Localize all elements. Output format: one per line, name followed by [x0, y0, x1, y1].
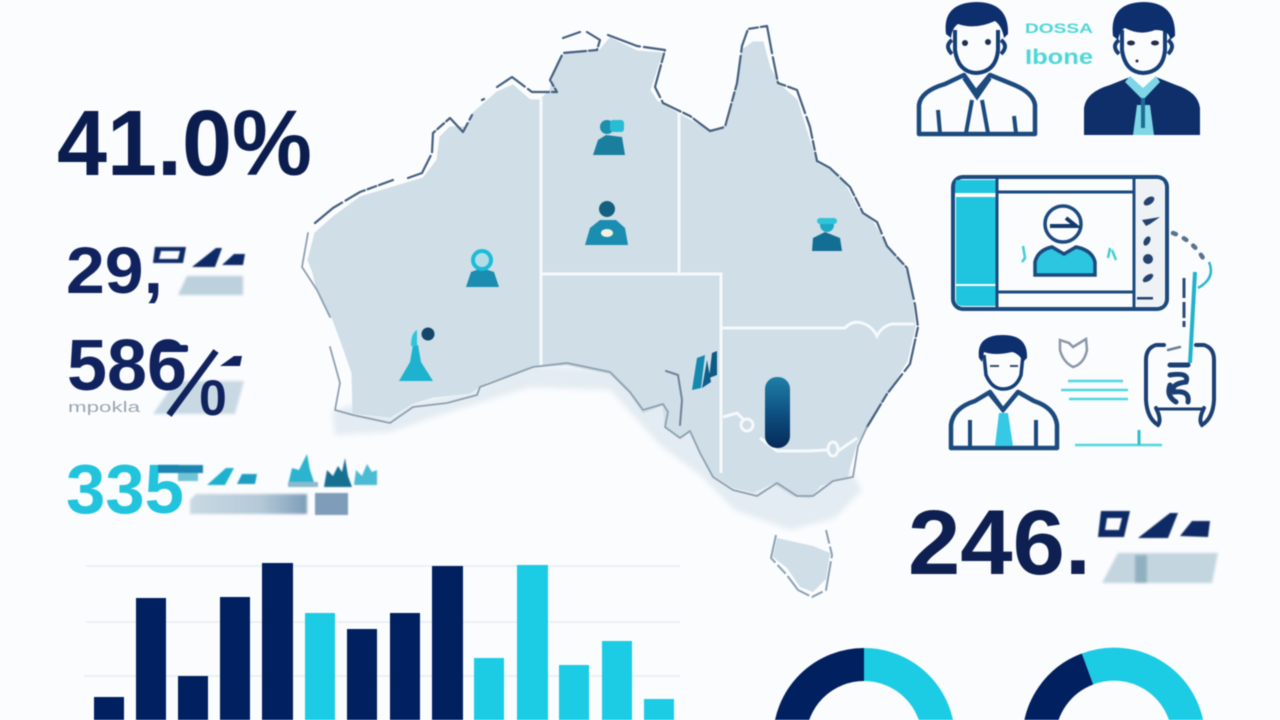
cyan bars: [305, 565, 674, 720]
cyan text lines: [1061, 381, 1162, 445]
blurred square: [315, 493, 348, 515]
face: [1122, 30, 1165, 73]
hair: [946, 2, 1008, 38]
small caption: mpokla: [68, 399, 141, 416]
wedge: [220, 356, 242, 366]
person on screen: [1035, 206, 1095, 275]
donut chart 1: [790, 664, 938, 720]
map icon: person north 1: [593, 120, 625, 155]
arm lines: [970, 392, 1036, 446]
teal marks: [158, 465, 257, 485]
navy segment: [1039, 669, 1088, 720]
cyan line: [1190, 272, 1195, 363]
Tasmania fill: [773, 538, 830, 592]
on-screen body: [1035, 247, 1095, 275]
sidebar: [955, 180, 996, 306]
map icon: tower west 2: [399, 328, 434, 381]
face: [955, 30, 998, 73]
label between persons: [1025, 20, 1093, 69]
hair: [1113, 2, 1175, 40]
cyan hook: [1198, 262, 1211, 288]
eyes: [990, 365, 1018, 367]
glitched marks: [1098, 511, 1210, 538]
tie centre: [1141, 98, 1145, 128]
blurred caption: [178, 276, 243, 295]
blurred caption bars: [190, 494, 307, 514]
navy bars: [94, 563, 463, 720]
stat number 586: 586: [67, 326, 187, 406]
small cyan marks: [1022, 246, 1116, 262]
small heart icon: [1060, 339, 1087, 367]
sidebar footer: [956, 286, 996, 306]
body: [1084, 77, 1200, 135]
eyes: [962, 39, 991, 46]
on-screen head: [1045, 206, 1081, 242]
stat: 246: [908, 492, 1218, 594]
tick mark: [1138, 430, 1140, 445]
map icon: slanted bars: [692, 351, 717, 390]
right toolbar: [1136, 180, 1164, 306]
percent slash: [169, 351, 216, 415]
cable and dots: [1173, 233, 1211, 363]
stat: 41.0%: 41.0%: [57, 91, 312, 195]
person 1: [919, 2, 1035, 134]
face: [984, 355, 1023, 389]
stat number 29: 29,: [66, 233, 163, 307]
stat: 58%: [67, 326, 244, 426]
blurred caption: [1102, 553, 1218, 583]
coastline dashed: [302, 26, 918, 496]
map shadow: [332, 365, 862, 530]
state borders: [541, 98, 914, 473]
top bar: [158, 345, 188, 352]
navy segment: [790, 664, 864, 720]
label line 2: Ibone: [1025, 46, 1093, 69]
stat number 246: 246.: [908, 492, 1091, 594]
label line 1: DOSSA: [1025, 20, 1093, 36]
stat: 335: [66, 450, 377, 528]
hair: [979, 335, 1027, 362]
cyan segment: [1088, 664, 1189, 720]
content frame lines: [997, 177, 1134, 309]
top squiggle: [1168, 347, 1180, 350]
ears: [948, 40, 1005, 54]
Tasmania: [771, 530, 832, 597]
bar chart: [84, 563, 680, 720]
glitched glyph marks: [153, 247, 245, 267]
collar and tie: [1125, 76, 1160, 135]
eyes: [1127, 40, 1159, 62]
skyline marks: [288, 454, 377, 487]
map icon: person west 1: [466, 251, 499, 287]
on-screen glasses: [1050, 218, 1076, 226]
ears: [1115, 40, 1172, 54]
grid lines: [84, 566, 680, 676]
donut chart 2: [1039, 664, 1189, 720]
stat number 335: 335: [66, 450, 184, 528]
map icon: person east: [812, 218, 842, 251]
device frame: [953, 177, 1167, 309]
gadget icon: [1146, 345, 1214, 425]
body: [951, 392, 1057, 448]
blurred caption bar: [153, 381, 244, 414]
map icon: capsule: [765, 377, 790, 448]
left bracket: [1146, 345, 1164, 425]
person 2: [1084, 2, 1200, 135]
mainland fill: [308, 38, 915, 498]
map: Australia: [302, 26, 918, 597]
dark dashed line: [1182, 278, 1186, 327]
stat: 29: [66, 233, 245, 307]
sidebar header: [955, 180, 996, 193]
toolbar icons: [1137, 195, 1160, 300]
tie: [938, 78, 1016, 133]
dotted arc: [1173, 233, 1203, 258]
Tasmania outline: [771, 530, 832, 597]
inner squiggle: [1169, 365, 1188, 402]
sidebar body: [956, 197, 996, 284]
screen device: [953, 177, 1167, 309]
percent zero: 0: [199, 370, 227, 426]
base bar: [1156, 408, 1202, 410]
cyan segment: [864, 664, 938, 720]
map icon: person north 2: [585, 201, 628, 245]
person 3: [951, 335, 1057, 448]
right bracket: [1196, 345, 1214, 425]
tie: [995, 413, 1013, 446]
body: [919, 75, 1035, 134]
